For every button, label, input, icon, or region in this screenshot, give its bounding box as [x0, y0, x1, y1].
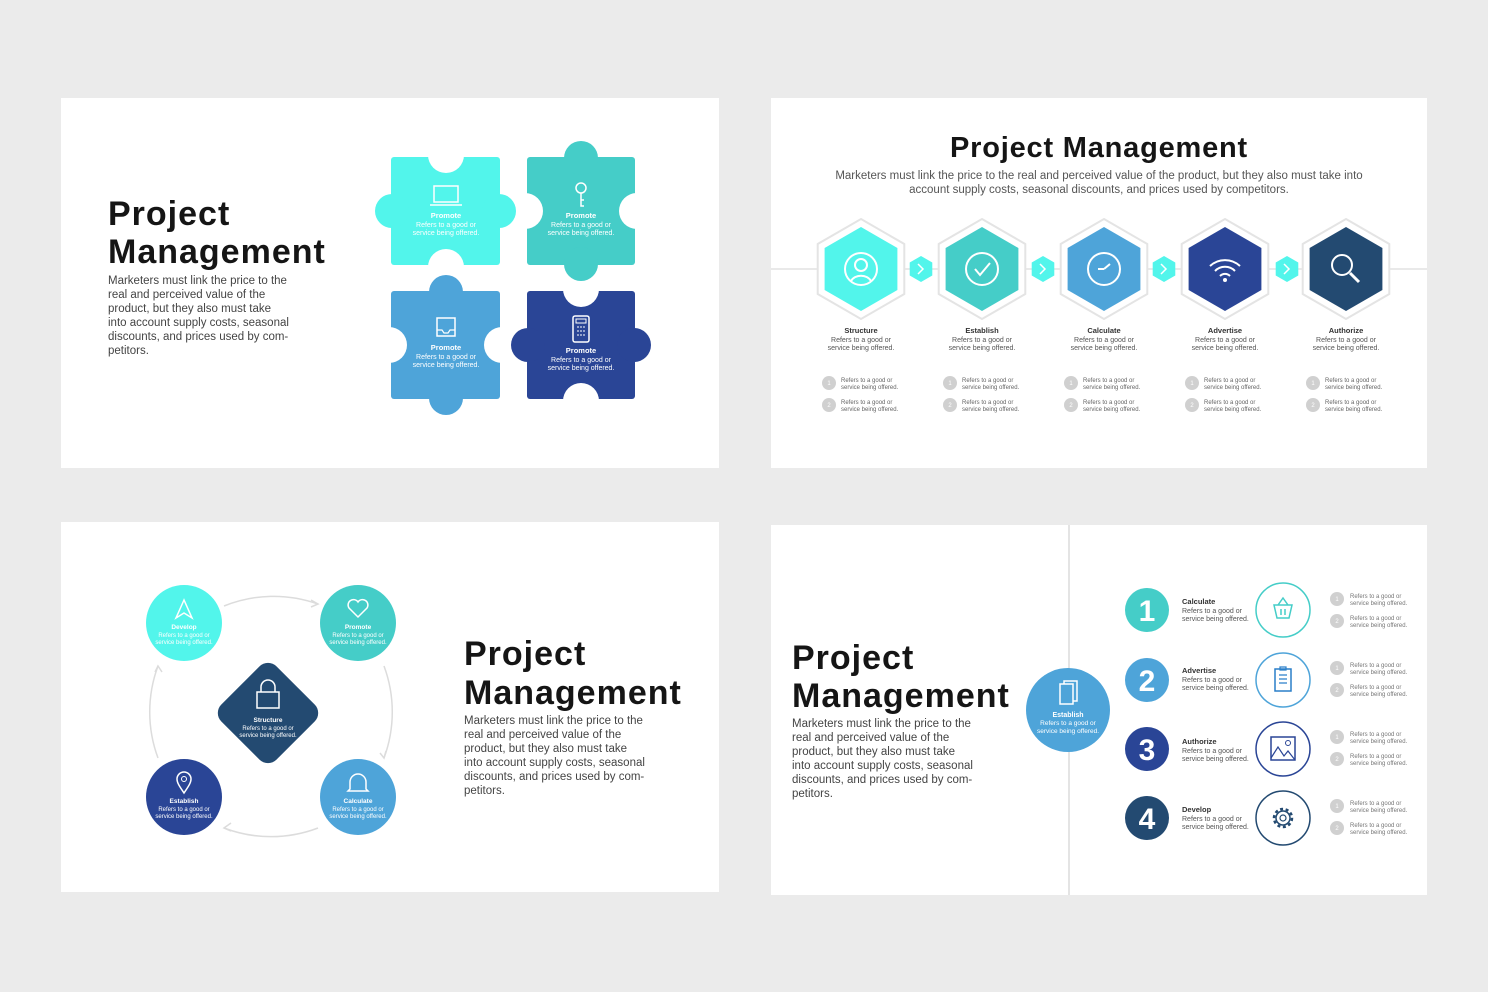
list item 3: authorize: Refers to a good or	[1182, 748, 1243, 755]
sub-points list: service being offered.	[1204, 407, 1262, 413]
sub-points list: 1	[1335, 804, 1339, 810]
text block: description: discounts, and prices used by com-	[464, 771, 644, 783]
hex step: authorize: Refers to a good or	[1316, 337, 1377, 344]
sub-points list: 1	[1335, 597, 1339, 603]
node: promote: Refers to a good or	[332, 633, 384, 639]
heading: project management (cycle): Management	[464, 674, 682, 712]
node: promote	[320, 585, 396, 661]
sub-points list: 2	[948, 403, 952, 409]
list item 2: advertise: Refers to a good or	[1182, 677, 1243, 684]
heading: project management (hexagon): Project Management	[950, 132, 1248, 164]
puzzle piece 4 content: Promote	[566, 346, 596, 355]
puzzle: 4 pieces	[371, 137, 655, 419]
list item 4: develop: Develop	[1182, 805, 1212, 814]
puzzle piece 2 content: Promote	[566, 211, 596, 220]
hex step: establish	[939, 219, 1025, 352]
arrows: cycle ring	[150, 596, 392, 837]
text block: description: real and perceived value of the	[464, 729, 621, 741]
text block: description: petitors.	[792, 788, 833, 800]
callout: establish circle: Refers to a good or	[1040, 720, 1097, 727]
sub-points list: Refers to a good or	[1350, 754, 1401, 760]
node: develop: Refers to a good or	[158, 633, 210, 639]
sub-points list: service being offered.	[1325, 385, 1383, 391]
list item 3: authorize	[1125, 722, 1310, 776]
callout: establish circle	[1026, 668, 1110, 752]
sub-points list: Refers to a good or	[1325, 378, 1376, 384]
sub-points list: service being offered.	[1350, 692, 1408, 698]
hex step: advertise	[1182, 219, 1268, 352]
sub-points list: 1	[1190, 381, 1194, 387]
node: develop: Develop	[171, 624, 197, 631]
node: structure (center diamond): Refers to a good or	[242, 726, 294, 732]
node: calculate: Refers to a good or	[332, 807, 384, 813]
text block: description: account supply costs, seasonal discounts, and prices used by competitors.	[909, 184, 1289, 196]
puzzle piece 3 content	[413, 318, 479, 369]
heading: project management (puzzle): Project	[108, 195, 230, 233]
list item 1: calculate: 1	[1139, 595, 1155, 628]
puzzle piece 1 content: Refers to a good or	[416, 222, 477, 229]
node: establish: Refers to a good or	[158, 807, 210, 813]
sub-points list: Refers to a good or	[1350, 616, 1401, 622]
sub-points list: 1	[1311, 381, 1315, 387]
heading: project management (cycle)	[464, 635, 682, 712]
list item 2: advertise: Advertise	[1182, 666, 1216, 675]
puzzle piece 4 content: service being offered.	[548, 365, 614, 372]
sub-points list: Refers to a good or	[1083, 400, 1134, 406]
hex step: structure: Structure	[844, 326, 878, 335]
sub-points list: 2	[827, 403, 831, 409]
hex step: calculate	[1061, 219, 1147, 352]
hex step: structure: service being offered.	[828, 345, 894, 352]
hex step: calculate: Refers to a good or	[1074, 337, 1135, 344]
puzzle piece 2 content: service being offered.	[548, 230, 614, 237]
heading: project management (puzzle)	[108, 195, 326, 271]
sub-points list	[822, 376, 1383, 413]
hex step: advertise: Refers to a good or	[1195, 337, 1256, 344]
puzzle piece 2 content	[548, 183, 614, 237]
sub-points list: 2	[1335, 688, 1339, 694]
node: promote: service being offered.	[329, 640, 387, 646]
sub-points list: 2	[1190, 403, 1194, 409]
text block: description	[835, 170, 1363, 196]
sub-points list: 1	[1335, 735, 1339, 741]
sub-points list: Refers to a good or	[1350, 594, 1401, 600]
puzzle piece 1 content	[413, 186, 479, 237]
hex step: calculate: Calculate	[1087, 326, 1121, 335]
sub-points list: Refers to a good or	[1204, 378, 1255, 384]
hex step: structure: Refers to a good or	[831, 337, 892, 344]
node: structure (center diamond)	[213, 658, 323, 768]
heading: project management (puzzle): Management	[108, 233, 326, 271]
text block: description: real and perceived value of the	[108, 289, 265, 301]
list item 3: authorize: service being offered.	[1182, 756, 1249, 763]
text block: description: real and perceived value of the	[792, 732, 949, 744]
puzzle piece 2 content: Refers to a good or	[551, 222, 612, 229]
node: structure (center diamond): Structure	[254, 717, 283, 724]
node: establish: service being offered.	[155, 814, 213, 820]
sub-points list: Refers to a good or	[1325, 400, 1376, 406]
sub-points list: service being offered.	[1350, 601, 1408, 607]
sub-points list: 2	[1069, 403, 1073, 409]
text block: description: petitors.	[108, 345, 149, 357]
sub-points list: service being offered.	[841, 407, 899, 413]
sub-points list: 2	[1335, 826, 1339, 832]
text block: description	[464, 715, 645, 797]
list item 4: develop: 4	[1139, 803, 1156, 836]
panel: cycle slide	[61, 522, 719, 892]
node: calculate: service being offered.	[329, 814, 387, 820]
sub-points list: Refers to a good or	[841, 400, 892, 406]
sub-points list: 2	[1311, 403, 1315, 409]
list item 1: calculate: Refers to a good or	[1182, 608, 1243, 615]
puzzle piece 1 content: Promote	[431, 211, 461, 220]
text block: description: product, but they also must take	[792, 746, 955, 758]
sub-points list: Refers to a good or	[962, 400, 1013, 406]
panel: puzzle slide	[61, 98, 719, 468]
list item 3: authorize: 3	[1139, 734, 1155, 767]
hex step: establish: service being offered.	[949, 345, 1015, 352]
text block: description: discounts, and prices used by com-	[792, 774, 972, 786]
text block: description	[792, 718, 973, 800]
sub-points list: service being offered.	[1350, 739, 1408, 745]
node: establish	[146, 759, 222, 835]
sub-points list: 1	[1335, 666, 1339, 672]
node: develop	[146, 585, 222, 661]
text block: description: discounts, and prices used by com-	[108, 331, 288, 343]
hex step: authorize: Authorize	[1329, 326, 1363, 335]
list item 2: advertise: 2	[1139, 665, 1155, 698]
sub-points list: 1	[827, 381, 831, 387]
sub-points list: service being offered.	[1083, 385, 1141, 391]
hex step: establish: Establish	[965, 326, 999, 335]
sub-points list: Refers to a good or	[1350, 801, 1401, 807]
heading: project management (cycle): Project	[464, 635, 586, 673]
text block: description: Marketers must link the price to the	[792, 718, 971, 730]
text block: description	[108, 275, 289, 357]
panel: hexagon process slide	[771, 98, 1427, 468]
text block: description: into account supply costs, seasonal	[792, 760, 973, 772]
list item 2: advertise: service being offered.	[1182, 685, 1249, 692]
node: establish: Establish	[170, 798, 198, 805]
sub-points list: service being offered.	[1350, 670, 1408, 676]
sub-points list: service being offered.	[841, 385, 899, 391]
sub-points list: Refers to a good or	[1350, 823, 1401, 829]
text block: description: petitors.	[464, 785, 505, 797]
callout: establish circle: service being offered.	[1037, 728, 1099, 735]
list item 1: calculate	[1125, 583, 1310, 637]
text block: description: Marketers must link the price to the	[464, 715, 643, 727]
node: structure (center diamond): service being offered.	[239, 733, 297, 739]
sub-points list: Refers to a good or	[841, 378, 892, 384]
sub-points list: Refers to a good or	[1350, 732, 1401, 738]
text block: description: into account supply costs, seasonal	[108, 317, 289, 329]
list item 2: advertise	[1125, 653, 1310, 707]
sub-points list: 1	[948, 381, 952, 387]
hex step: advertise: Advertise	[1208, 326, 1242, 335]
hex step: advertise: service being offered.	[1192, 345, 1258, 352]
list item 4: develop: Refers to a good or	[1182, 816, 1243, 823]
puzzle piece 3 content: Refers to a good or	[416, 354, 477, 361]
hex step: calculate: service being offered.	[1071, 345, 1137, 352]
puzzle piece 3 content: Promote	[431, 343, 461, 352]
list item 4: develop: service being offered.	[1182, 824, 1249, 831]
sub-points list: service being offered.	[1350, 830, 1408, 836]
list item 3: authorize: Authorize	[1182, 737, 1217, 746]
sub-points list: Refers to a good or	[1083, 378, 1134, 384]
node: promote: Promote	[345, 624, 372, 631]
node: develop: service being offered.	[155, 640, 213, 646]
text block: description: Marketers must link the price to the real and perceived value of the product, but they also must take into	[835, 170, 1363, 182]
sub-points list: service being offered.	[1350, 808, 1408, 814]
hex step: establish: Refers to a good or	[952, 337, 1013, 344]
puzzle piece 4 content	[548, 316, 614, 372]
heading: project management (list): Management	[792, 677, 1010, 715]
arrows: hex connectors	[910, 256, 1298, 282]
node: calculate	[320, 759, 396, 835]
sub-points list: Refers to a good or	[1350, 663, 1401, 669]
heading: project management (list)	[792, 639, 1010, 715]
sub-points list: 2	[1335, 757, 1339, 763]
list item 1: calculate: service being offered.	[1182, 616, 1249, 623]
sub-points list: service being offered.	[1350, 623, 1408, 629]
hex step: authorize	[1303, 219, 1389, 352]
node: calculate: Calculate	[344, 798, 373, 805]
text block: description: product, but they also must take	[464, 743, 627, 755]
sub-points list	[1330, 592, 1408, 836]
sub-points list: service being offered.	[1204, 385, 1262, 391]
sub-points list: Refers to a good or	[962, 378, 1013, 384]
puzzle piece 4 content: Refers to a good or	[551, 357, 612, 364]
text block: description: product, but they also must take	[108, 303, 271, 315]
hex step: authorize: service being offered.	[1313, 345, 1379, 352]
sub-points list: service being offered.	[1325, 407, 1383, 413]
sub-points list: service being offered.	[962, 407, 1020, 413]
callout: establish circle: Establish	[1052, 712, 1084, 719]
panel: numbered list slide	[771, 525, 1427, 895]
list item 4: develop	[1125, 791, 1310, 845]
list item 1: calculate: Calculate	[1182, 597, 1215, 606]
hex step: structure	[818, 219, 904, 352]
sub-points list: Refers to a good or	[1350, 685, 1401, 691]
puzzle piece 1 content: service being offered.	[413, 230, 479, 237]
sub-points list: 1	[1069, 381, 1073, 387]
sub-points list: Refers to a good or	[1204, 400, 1255, 406]
text block: description: into account supply costs, seasonal	[464, 757, 645, 769]
text block: description: Marketers must link the price to the	[108, 275, 287, 287]
sub-points list: service being offered.	[1083, 407, 1141, 413]
sub-points list: 2	[1335, 619, 1339, 625]
heading: project management (list): Project	[792, 639, 914, 677]
puzzle piece 3 content: service being offered.	[413, 362, 479, 369]
sub-points list: service being offered.	[962, 385, 1020, 391]
sub-points list: service being offered.	[1350, 761, 1408, 767]
